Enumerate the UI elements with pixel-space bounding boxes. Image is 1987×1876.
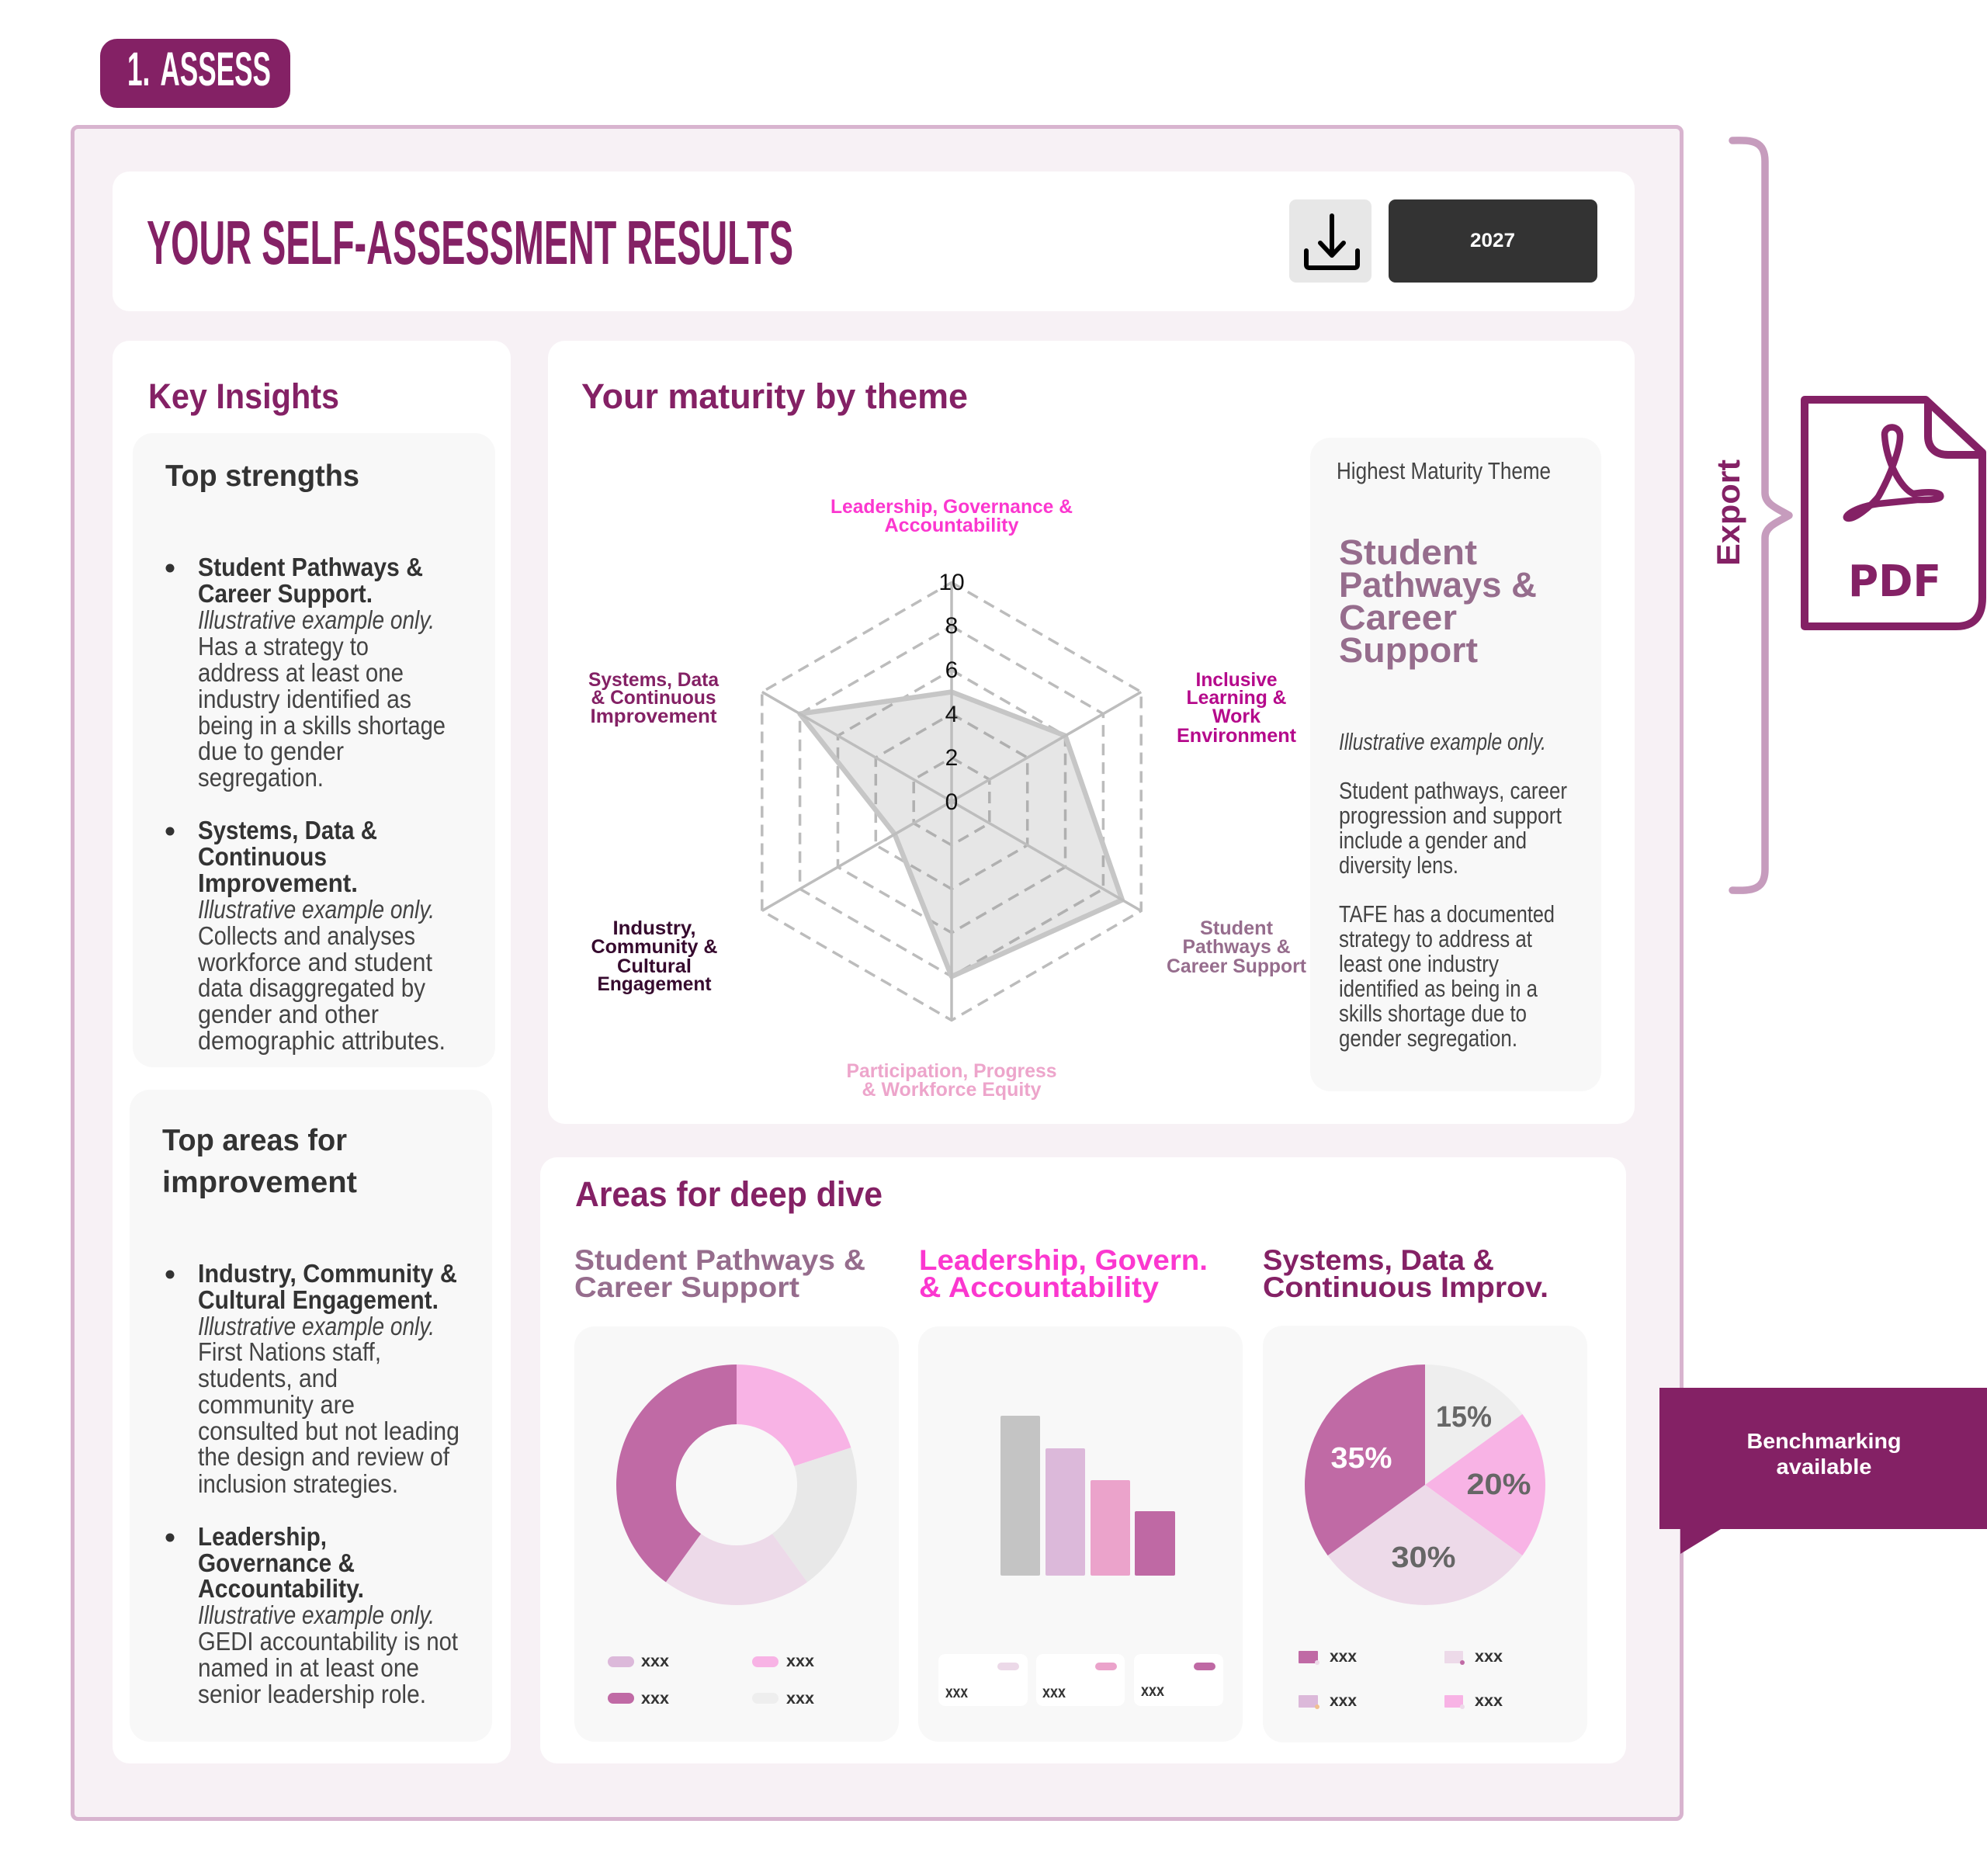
donut legend: xxx (641, 1690, 669, 1708)
panel: top strengths: Improvement. (198, 869, 358, 897)
radar chart: 8 (945, 613, 958, 639)
axis label: participation: & Workforce Equity (862, 1079, 1042, 1101)
panel: top strengths: Illustrative example only. (198, 895, 435, 924)
donut legend (608, 1652, 814, 1708)
year selector: 2027 (1470, 230, 1515, 251)
subheading: leadership (919, 1244, 1208, 1303)
donut legend: xxx (786, 1690, 814, 1708)
label: export: Export (1710, 459, 1746, 566)
theme name (1339, 532, 1537, 670)
brace: export bracket (1732, 140, 1789, 890)
panel: top areas for improvement: GEDI accountability is not (198, 1627, 458, 1656)
panel: highest maturity theme: identified as being in a (1339, 975, 1538, 1002)
donut legend: xxx (786, 1652, 814, 1670)
chart tile: pie: 30% (1391, 1541, 1456, 1574)
subheading: systems: Systems, Data & (1263, 1244, 1494, 1276)
heading: your maturity by theme: Your maturity by theme (581, 376, 968, 416)
chart tile: pie: 20% (1467, 1469, 1531, 1501)
panel: top strengths: Collects and analyses (198, 921, 415, 950)
panel: top areas for improvement: Leadership, (198, 1522, 327, 1551)
axis label: student pathways: Pathways & (1183, 936, 1290, 958)
chart tile: pie (1263, 1326, 1587, 1742)
panel: top strengths: being in a skills shortage (198, 711, 446, 740)
subheading: student pathways: Career Support (574, 1271, 799, 1303)
axis label: inclusive learning: Inclusive (1195, 669, 1278, 691)
section tag: 1. Assess: 1. ASSESS (127, 43, 271, 95)
axis label: industry (591, 917, 717, 995)
axis label: leadership: Leadership, Governance & (831, 496, 1073, 518)
panel: top areas for improvement: senior leadership role. (198, 1680, 426, 1708)
panel: outer results frame (73, 127, 1681, 1819)
panel: highest maturity theme: least one industry (1339, 950, 1499, 977)
panel: top areas for improvement: students, and (198, 1364, 338, 1392)
axis label: participation: Participation, Progress (846, 1060, 1057, 1082)
axis label: inclusive learning: Work (1212, 706, 1261, 727)
callout: benchmarking available: Benchmarking (1746, 1429, 1902, 1453)
panel: top areas for improvement: Governance & (198, 1548, 355, 1577)
panel: highest maturity theme: Student pathways, career (1339, 777, 1567, 804)
subheading: systems: Continuous Improv. (1263, 1271, 1548, 1303)
panel: top areas for improvement: First Nations staff, (198, 1337, 381, 1366)
chart tile: bar chart (918, 1326, 1243, 1742)
panel: top strengths: Systems, Data & (198, 816, 377, 844)
panel: top areas for improvement: the design and review of (198, 1442, 450, 1471)
axis label: industry: Community & (591, 936, 717, 958)
callout: benchmarking available: available (1776, 1455, 1872, 1479)
panel: top areas for improvement: named in at least one (198, 1653, 419, 1682)
heading: key insights: Key Insights (148, 376, 339, 416)
panel: areas for deep dive (540, 1157, 1626, 1763)
panel: title bar (113, 172, 1635, 311)
panel: top areas for improvement: consulted but not leading (198, 1417, 459, 1445)
pie legend: xxx (1330, 1648, 1357, 1666)
panel: top strengths: industry identified as (198, 685, 411, 713)
subheading: systems (1263, 1244, 1548, 1303)
chart tile: pie: 15% (1436, 1401, 1492, 1434)
axis label: industry: Cultural (617, 955, 692, 977)
panel: top strengths: data disaggregated by (198, 973, 425, 1002)
pie legend (1299, 1648, 1503, 1710)
panel: top areas for improvement: Illustrative example only. (198, 1600, 435, 1629)
theme name: Student (1339, 532, 1477, 572)
panel: top areas for improvement (130, 1090, 492, 1742)
panel: top strengths (133, 433, 495, 1067)
radar chart (588, 496, 1307, 1101)
chart tile: donut (574, 1326, 899, 1742)
panel: key insights (113, 341, 511, 1763)
bar legend: xxx (1141, 1682, 1164, 1700)
icon: pdf document (1805, 400, 1985, 626)
radar chart: 0 (945, 789, 958, 815)
panel: highest maturity theme: gender segregation. (1339, 1025, 1517, 1052)
axis label: systems: Improvement (590, 706, 717, 727)
panel: top strengths: Illustrative example only. (198, 605, 435, 634)
panel: top areas for improvement: Cultural Engagement. (198, 1285, 439, 1314)
panel: top areas for improvement: Illustrative example only. (198, 1312, 435, 1340)
panel: highest maturity theme: diversity lens. (1339, 851, 1458, 879)
panel: top strengths: gender and other (198, 1000, 379, 1028)
subheading: leadership: & Accountability (919, 1271, 1159, 1303)
axis label: student pathways: Student (1200, 917, 1274, 939)
panel: top areas for improvement: inclusion strategies. (198, 1469, 398, 1498)
panel: top strengths: Continuous (198, 842, 327, 871)
panel: top strengths: workforce and student (197, 948, 432, 976)
panel: top areas for improvement: improvement (162, 1166, 357, 1199)
panel: highest maturity theme: Illustrative example only. (1339, 728, 1546, 755)
axis label: industry: Industry, (613, 917, 695, 939)
axis label: inclusive learning: Environment (1177, 725, 1297, 747)
callout: benchmarking available (1659, 1388, 1987, 1554)
panel: top areas for improvement: Top areas for (162, 1124, 347, 1157)
heading: areas for deep dive: Areas for deep dive (575, 1174, 883, 1214)
radar chart: 6 (945, 657, 958, 683)
icon: pdf document: PDF (1848, 557, 1941, 607)
axis label: inclusive learning: Learning & (1186, 687, 1287, 709)
donut legend: xxx (641, 1652, 669, 1670)
year selector (1389, 199, 1597, 283)
panel: top strengths: address at least one (198, 658, 404, 687)
panel: highest maturity theme: skills shortage due to (1339, 1000, 1527, 1027)
panel: maturity by theme (548, 341, 1635, 1124)
panel: highest maturity theme: include a gender and (1339, 827, 1527, 854)
panel: top strengths: demographic attributes. (198, 1026, 446, 1055)
axis label: student pathways (1167, 917, 1307, 977)
panel: top strengths: Career Support. (198, 579, 373, 608)
axis label: leadership (831, 496, 1073, 536)
chart tile: pie: 35% (1330, 1442, 1392, 1475)
section tag: 1. Assess (100, 39, 290, 108)
panel: highest maturity theme (1310, 438, 1601, 1091)
axis label: leadership: Accountability (885, 515, 1019, 536)
pie legend: xxx (1475, 1692, 1503, 1710)
panel: top strengths: segregation. (198, 763, 324, 792)
axis label: student pathways: Career Support (1167, 955, 1307, 977)
bar legend: xxx (945, 1684, 968, 1701)
panel: highest maturity theme: progression and support (1339, 802, 1562, 829)
bar legend (938, 1654, 1223, 1706)
panel: top strengths: Student Pathways & (198, 553, 423, 581)
subheading: student pathways (574, 1244, 865, 1303)
pie legend: xxx (1475, 1648, 1503, 1666)
radar chart: 2 (945, 745, 958, 771)
axis label: systems (588, 669, 720, 727)
panel: top strengths: Top strengths (165, 459, 359, 493)
theme name: Support (1339, 630, 1478, 670)
panel: top areas for improvement: Industry, Community & (198, 1259, 457, 1288)
subheading: student pathways: Student Pathways & (574, 1244, 865, 1276)
pie legend: xxx (1330, 1692, 1357, 1710)
panel: highest maturity theme: Highest Maturity Theme (1337, 457, 1551, 484)
panel: top areas for improvement: Accountability. (198, 1574, 364, 1603)
axis label: industry: Engagement (598, 973, 712, 995)
axis label: participation (846, 1060, 1057, 1101)
panel: highest maturity theme: strategy to address at (1339, 925, 1532, 952)
subheading: leadership: Leadership, Govern. (919, 1244, 1208, 1276)
radar chart: 10 (938, 570, 965, 595)
bar legend: xxx (1042, 1684, 1066, 1701)
icon: download button (1289, 199, 1371, 283)
axis label: systems: & Continuous (591, 687, 716, 709)
radar chart: 4 (945, 702, 958, 727)
panel: top strengths: due to gender (198, 737, 344, 765)
title: YOUR SELF-ASSESSMENT RESULTS (147, 208, 793, 277)
theme name: Career (1339, 598, 1457, 637)
theme name: Pathways & (1339, 565, 1537, 605)
axis label: systems: Systems, Data (588, 669, 720, 691)
panel: top areas for improvement: community are (198, 1390, 355, 1419)
panel: highest maturity theme: TAFE has a documented (1339, 900, 1555, 928)
axis label: inclusive learning (1177, 669, 1297, 747)
panel: top strengths: Has a strategy to (198, 632, 369, 661)
